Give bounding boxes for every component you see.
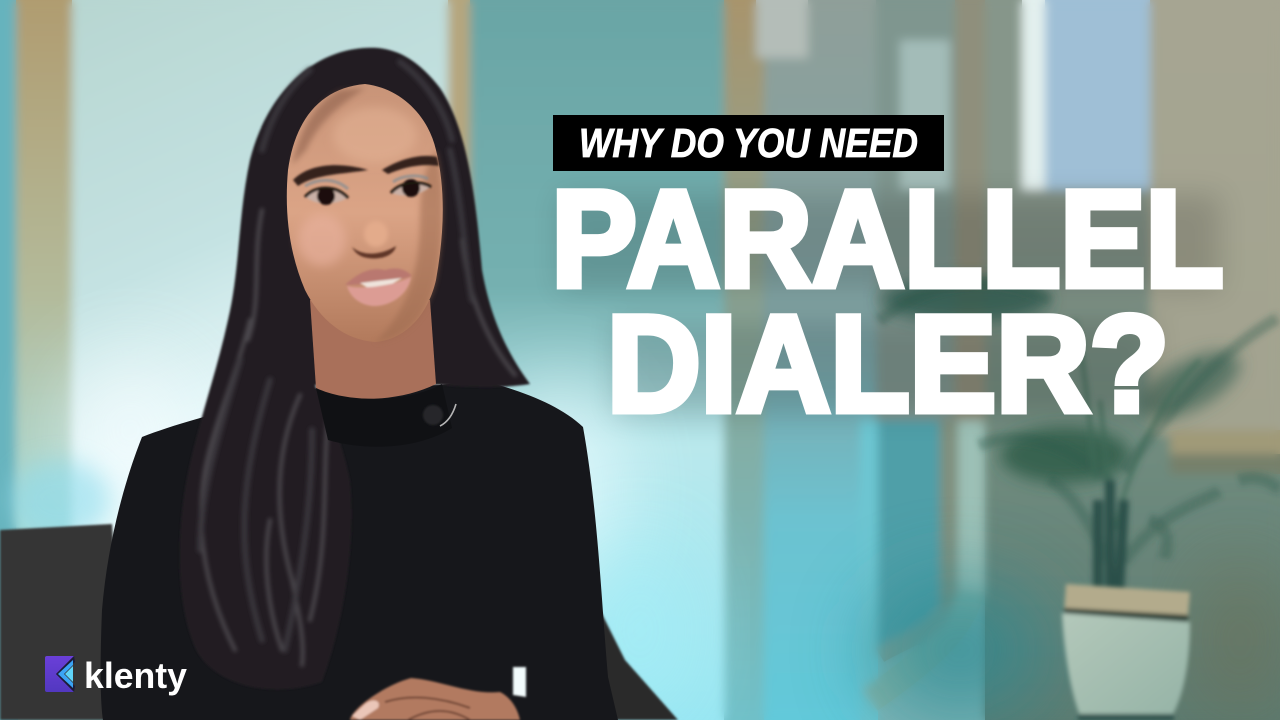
hair back (180, 48, 530, 690)
eyes (305, 176, 431, 205)
person (101, 48, 618, 720)
sweater (101, 380, 618, 720)
title: PARALLEL (552, 163, 1224, 316)
mouth (345, 268, 412, 306)
hair highlights (200, 62, 515, 665)
title shadow (560, 195, 1220, 415)
face shading (292, 88, 443, 342)
plant stems (1098, 480, 1124, 612)
logo icon (45, 656, 75, 692)
sofa (0, 524, 678, 720)
logo wordmark: klenty (84, 655, 187, 696)
plant pot (1062, 584, 1190, 720)
floor tint lower right (1200, 560, 1280, 720)
potted plant (880, 278, 1280, 720)
hands (350, 667, 526, 720)
microphone (423, 404, 456, 426)
eyebrows (293, 165, 368, 186)
logo (45, 655, 187, 696)
floor tint lower left (870, 580, 1050, 720)
neck (310, 300, 436, 399)
face (287, 84, 443, 342)
subtitle banner: WHY DO YOU NEED (579, 120, 918, 166)
title: DIALER? (607, 288, 1169, 441)
title (552, 163, 1224, 441)
nose (352, 221, 396, 258)
sweater collar (316, 384, 452, 447)
